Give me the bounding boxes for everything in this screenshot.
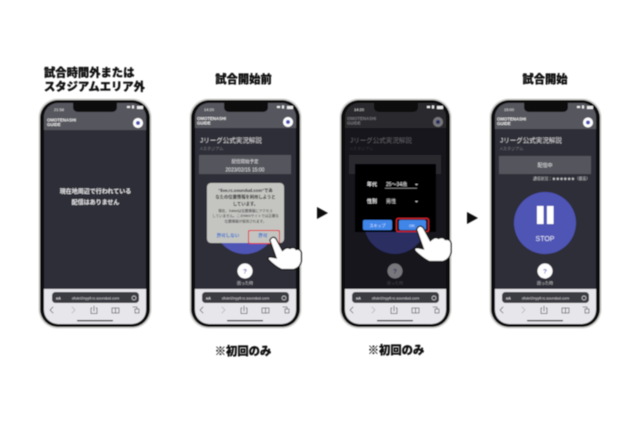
phone 3: age and gender form	[340, 98, 452, 328]
phone 3: age and gender form: OMOTENASHI	[347, 116, 376, 121]
phone 4: streaming with stop button: GUIDE	[497, 121, 511, 126]
phone 4: streaming with stop button: 配信中	[537, 162, 553, 169]
phone 3: age and gender form: 年代	[367, 181, 377, 188]
phone 2: location permission dialog: aA	[206, 296, 211, 300]
phone 4: streaming with stop button: dfukri2nyyfl.rc.soundud.com	[522, 296, 569, 300]
phone 2: location permission dialog: 許可	[258, 232, 268, 239]
phone 4: streaming with stop button: ?	[543, 268, 547, 276]
phone 4: streaming with stop button	[490, 98, 602, 328]
phone 2: location permission dialog	[190, 98, 302, 328]
phone 4: streaming with stop button: 通信状況：★★★★★★（最高）	[533, 176, 590, 181]
phone 2: location permission dialog: 2023/02/15 15:00	[226, 168, 265, 174]
phone 2: location permission dialog: Jリーグ公式実況解説	[200, 136, 262, 144]
phone 2: location permission dialog: "live.rc.soundud.com"であ	[218, 188, 273, 193]
phone 2: location permission dialog: GUIDE	[197, 120, 211, 126]
phone 4: streaming with stop button: aA	[506, 296, 511, 300]
phone 3: age and gender form: ?	[393, 268, 397, 276]
phone 1: no streams available: GUIDE	[47, 122, 61, 127]
heading: outside match hours or stadium area: 試合時間外または	[44, 66, 135, 80]
arrow: to profile step	[317, 207, 328, 219]
phone 3: age and gender form: GUIDE	[347, 120, 361, 126]
phone 2: location permission dialog: しています。	[233, 200, 258, 208]
icon: pointing hand on allow button	[268, 237, 301, 270]
phone 3: age and gender form: Aスタジアム	[350, 145, 373, 152]
phone 2: location permission dialog: 位置情報が使用されます。	[225, 218, 266, 224]
phone 1: no streams available: dfukri2nyyfl.rc.soundud.com	[72, 296, 119, 300]
phone 3: age and gender form: aA	[356, 296, 361, 300]
phone 3: age and gender form: 25～34歳	[386, 181, 407, 188]
phone 4: streaming with stop button: Aスタジアム	[500, 145, 523, 152]
phone 3: age and gender form: 14:20	[354, 107, 365, 112]
phone 2: location permission dialog: 許可しない	[217, 232, 240, 239]
phone 3: age and gender form: 男性	[386, 198, 396, 205]
phone 1: no streams available: 現在地周辺で行われている	[60, 188, 131, 196]
heading: outside match hours or stadium area: スタジアムエリア外	[44, 80, 146, 94]
phone 4: streaming with stop button: OMOTENASHI	[497, 116, 526, 122]
phone 4: streaming with stop button: 15:00	[504, 107, 515, 112]
phone 2: location permission dialog: していません。このWebサイトでは正確な	[212, 213, 279, 218]
phone 3: age and gender form: 性別	[367, 198, 377, 205]
phone 3: age and gender form: 困った時	[387, 280, 403, 286]
phone 4: streaming with stop button: 困った時	[537, 280, 553, 286]
phone 3: age and gender form: スキップ	[370, 222, 386, 228]
heading: outside match hours or stadium area	[44, 66, 146, 94]
note: first time only (before match): ※初回のみ	[215, 344, 271, 358]
phone 2: location permission dialog: 困った時	[237, 280, 253, 286]
phone 2: location permission dialog: 現在、Safariは位置情報にアクセス	[218, 208, 273, 213]
phone 2: location permission dialog: なたの位置情報を利用しようと	[215, 194, 276, 200]
phone 4: streaming with stop button: Jリーグ公式実況解説	[500, 136, 562, 144]
phone 1: no streams available: 配信はありません	[72, 198, 119, 206]
phone 3: age and gender form: OK	[409, 223, 415, 228]
phone 3: age and gender form: Jリーグ公式実況解説	[350, 136, 412, 144]
phone 2: location permission dialog: 配信開始予定	[232, 158, 259, 165]
phone 2: location permission dialog: OMOTENASHI	[197, 116, 226, 121]
phone 2: location permission dialog: ?	[243, 268, 247, 276]
phone 4: streaming with stop button: STOP	[536, 236, 555, 243]
phone 3: age and gender form: dfukri2nyyfl.rc.soundud.com	[372, 296, 419, 300]
phone 2: location permission dialog: Aスタジアム	[200, 145, 223, 152]
phone 2: location permission dialog: 14:20	[204, 107, 215, 112]
arrow: to match start	[467, 212, 478, 224]
phone 1: no streams available: aA	[56, 296, 61, 300]
icon: pointing hand on OK button	[415, 226, 451, 262]
heading: match start: 試合開始	[522, 72, 568, 86]
phone 1: no streams available	[38, 98, 152, 328]
heading: before match: 試合開始前	[215, 72, 272, 86]
phone 2: location permission dialog: dfukri2nyyfl.rc.soundud.com	[222, 296, 269, 300]
note: first time only (form): ※初回のみ	[368, 343, 424, 357]
phone 1: no streams available: 21:58	[54, 107, 65, 112]
phone 1: no streams available: OMOTENASHI	[47, 118, 76, 122]
